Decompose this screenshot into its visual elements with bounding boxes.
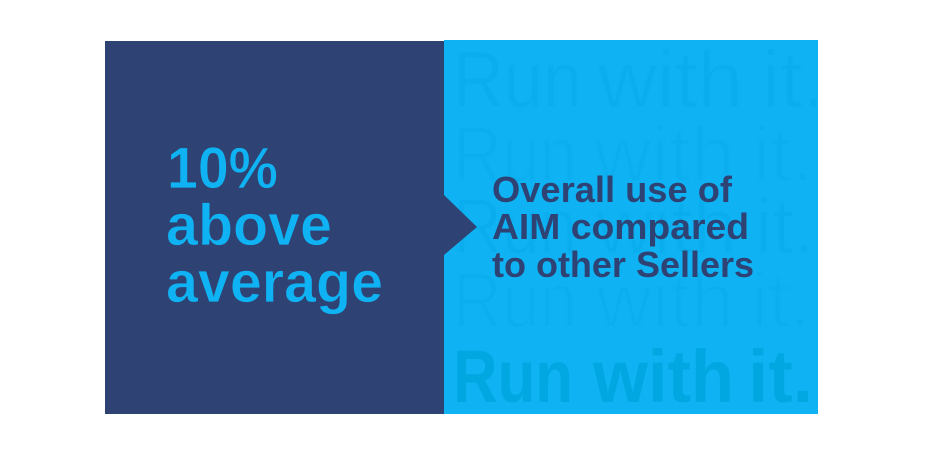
description text: AIM compared bbox=[492, 206, 749, 247]
heading: 10% above average bbox=[166, 136, 383, 315]
watermark: Run with it.: Run bbox=[453, 110, 577, 198]
description text bbox=[492, 169, 754, 285]
watermark: Run with it.: with bbox=[595, 256, 734, 344]
panel: description bbox=[444, 35, 825, 418]
heading: 10% above average: 10% bbox=[167, 136, 278, 201]
watermark: Run with it.: with bbox=[597, 35, 743, 124]
panel: statistic bbox=[105, 41, 444, 414]
watermark: Run with it.: Run bbox=[453, 335, 573, 418]
watermark: Run with it.: with bbox=[595, 182, 737, 270]
watermark: Run with it.: with bbox=[593, 110, 735, 198]
heading: 10% above average: above bbox=[166, 193, 332, 258]
watermark: Run with it.: it. bbox=[748, 335, 813, 418]
watermark: Run with it.: it. bbox=[762, 35, 825, 124]
heading: 10% above average: average bbox=[166, 250, 383, 315]
infographic bbox=[105, 40, 818, 414]
watermark: Run with it. bbox=[457, 348, 808, 402]
watermark: Run with it.: Run bbox=[453, 256, 577, 344]
watermark: Run with it.: it. bbox=[753, 110, 813, 198]
description text: to other Sellers bbox=[492, 244, 754, 285]
watermark: Run with it.: Run bbox=[453, 182, 577, 270]
watermark: Run with it.: with bbox=[592, 335, 734, 418]
watermark: Run with it.: it. bbox=[751, 256, 811, 344]
watermark: Run with it.: it. bbox=[755, 182, 815, 270]
arrow bbox=[444, 195, 477, 255]
description text: Overall use of bbox=[492, 169, 733, 210]
watermark: Run with it.: Run bbox=[453, 35, 582, 124]
